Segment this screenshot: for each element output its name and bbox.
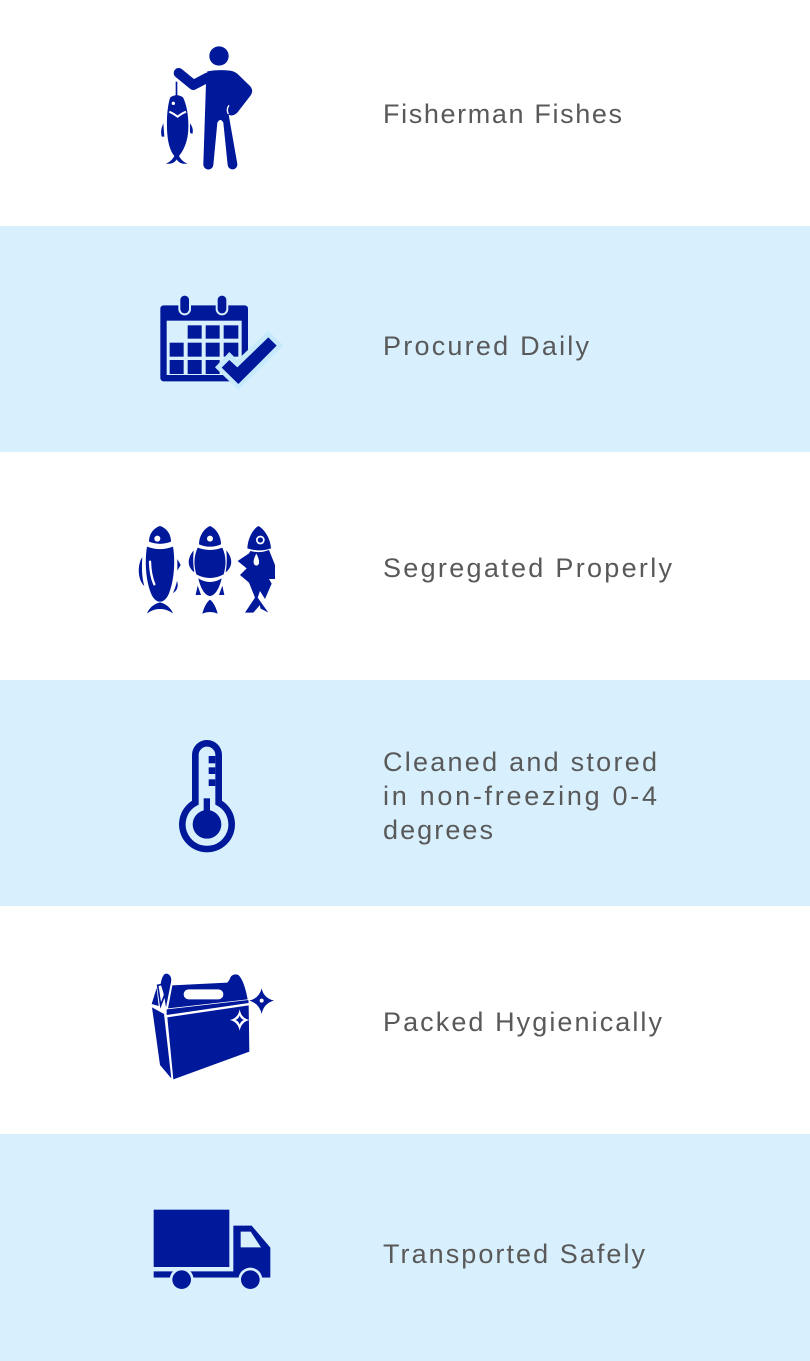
fish three [238, 526, 275, 613]
icon: fisherman holding a fish [161, 46, 252, 170]
text: cleaned and stored: in non-freezing 0-4 [383, 781, 657, 811]
icon: sparkling packed box [152, 974, 274, 1079]
text: cleaned and stored: Cleaned and stored [383, 747, 657, 777]
panel: transported safely [0, 1134, 810, 1361]
text: cleaned and stored: degrees [383, 815, 493, 845]
panel: fisherman fishes [0, 0, 810, 226]
panel: cleaned and stored [0, 680, 810, 906]
text: procured daily: Procured Daily [383, 331, 590, 361]
fish two [189, 526, 231, 614]
icon: delivery truck [154, 1210, 274, 1298]
text: fisherman fishes: Fisherman Fishes [383, 99, 622, 129]
text: segregated properly: Segregated Properly [383, 553, 672, 583]
icon: thermometer [182, 743, 232, 849]
icon: three fish [139, 526, 275, 614]
fish one [139, 526, 181, 614]
text: packed hygienically: Packed Hygienically [383, 1007, 662, 1037]
panel: segregated properly [0, 452, 810, 680]
icon: calendar with check mark [160, 294, 283, 390]
text: cleaned and stored [383, 747, 657, 845]
text: transported safely: Transported Safely [383, 1239, 646, 1269]
panel: procured daily [0, 226, 810, 452]
panel: packed hygienically [0, 906, 810, 1134]
